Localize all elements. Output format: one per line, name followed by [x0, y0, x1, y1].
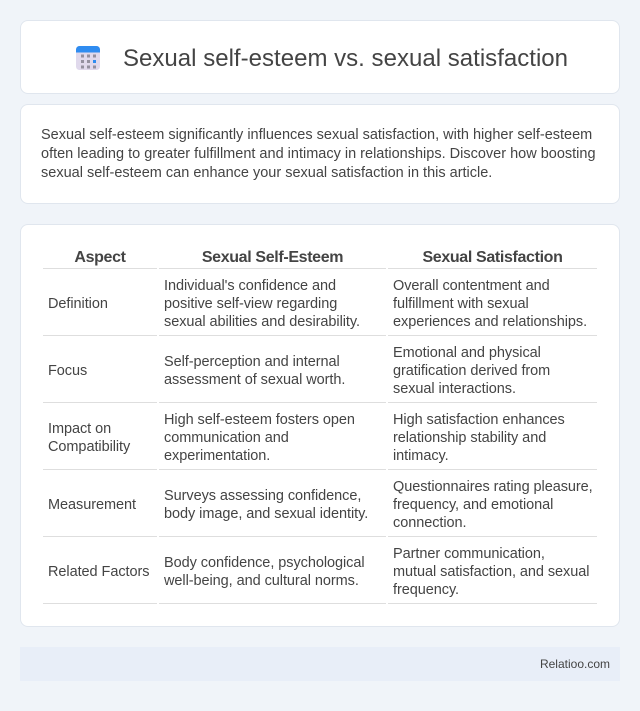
row: Related Factors: Related Factors [48, 564, 149, 580]
column header: Sexual Self-Esteem: Sexual Self-Esteem [202, 249, 343, 266]
footer source text: Relatioo.com [540, 657, 610, 671]
row: Impact on Compatibility [48, 421, 130, 455]
icon: calendar [76, 46, 100, 70]
row: Impact on Compatibility: Impact on [48, 421, 111, 437]
row: Impact on Compatibility: Compatibility [48, 439, 130, 455]
Impact: satisfaction: High satisfaction enhances [393, 412, 565, 428]
Definition: satisfaction: experiences and relationships. [393, 314, 587, 330]
Definition: satisfaction: Overall contentment and [393, 278, 550, 294]
Impact: satisfaction: intimacy. [393, 448, 449, 464]
Focus: satisfaction [393, 345, 550, 397]
Related Factors: satisfaction: mutual satisfaction, and sexual [393, 564, 589, 580]
intro paragraph [41, 127, 596, 181]
Measurement: satisfaction: Questionnaires rating pleasure, [393, 479, 593, 495]
Impact: self-esteem: communication and [164, 430, 289, 446]
Definition: self-esteem: Individual's confidence and [164, 278, 336, 294]
Definition: satisfaction: fulfillment with sexual [393, 296, 529, 312]
Definition: self-esteem [164, 278, 360, 330]
row: Definition: Definition [48, 296, 108, 312]
Related Factors: satisfaction: Partner communication, [393, 546, 545, 562]
Measurement: satisfaction: frequency, and emotional [393, 497, 553, 513]
intro text panel [20, 104, 620, 204]
heading: Sexual self-esteem vs. sexual satisfaction [123, 45, 568, 72]
Measurement: satisfaction [393, 479, 593, 531]
Measurement: self-esteem [164, 488, 368, 522]
intro paragraph: Sexual self-esteem significantly influences sexual satisfaction, with higher self-esteem [41, 127, 592, 143]
Related Factors: satisfaction [393, 546, 589, 598]
row: Focus: Focus [48, 363, 87, 379]
Impact: self-esteem [164, 412, 355, 464]
footer bar [20, 647, 620, 681]
Definition: self-esteem: positive self-view regarding [164, 296, 337, 312]
Focus: self-esteem: assessment of sexual worth. [164, 372, 345, 388]
Related Factors: self-esteem: well-being, and cultural norms. [164, 573, 359, 589]
intro paragraph: often leading to greater fulfillment and intimacy in relationships. Discover how boosting [41, 146, 596, 162]
Impact: satisfaction: relationship stability and [393, 430, 546, 446]
Related Factors: self-esteem [164, 555, 365, 589]
Related Factors: self-esteem: Body confidence, psychological [164, 555, 365, 571]
Focus: self-esteem: Self-perception and internal [164, 354, 340, 370]
Impact: self-esteem: experimentation. [164, 448, 270, 464]
Focus: self-esteem [164, 354, 345, 388]
comparison table panel [20, 224, 620, 627]
column header: Aspect: Aspect [74, 249, 126, 266]
intro paragraph: sexual self-esteem can enhance your sexual satisfaction in this article. [41, 165, 492, 181]
Related Factors: satisfaction: frequency. [393, 582, 459, 598]
Definition: satisfaction [393, 278, 587, 330]
title card [20, 20, 620, 94]
Measurement: self-esteem: Surveys assessing confidence, [164, 488, 361, 504]
Focus: satisfaction: gratification derived from [393, 363, 550, 379]
Definition: self-esteem: sexual abilities and desirability. [164, 314, 360, 330]
Focus: satisfaction: sexual interactions. [393, 381, 516, 397]
Impact: self-esteem: High self-esteem fosters open [164, 412, 355, 428]
Impact: satisfaction [393, 412, 565, 464]
column header: Sexual Satisfaction: Sexual Satisfaction [422, 249, 563, 266]
Measurement: self-esteem: body image, and sexual identity. [164, 506, 368, 522]
Measurement: satisfaction: connection. [393, 515, 467, 531]
row: Measurement: Measurement [48, 497, 136, 513]
Focus: satisfaction: Emotional and physical [393, 345, 541, 361]
